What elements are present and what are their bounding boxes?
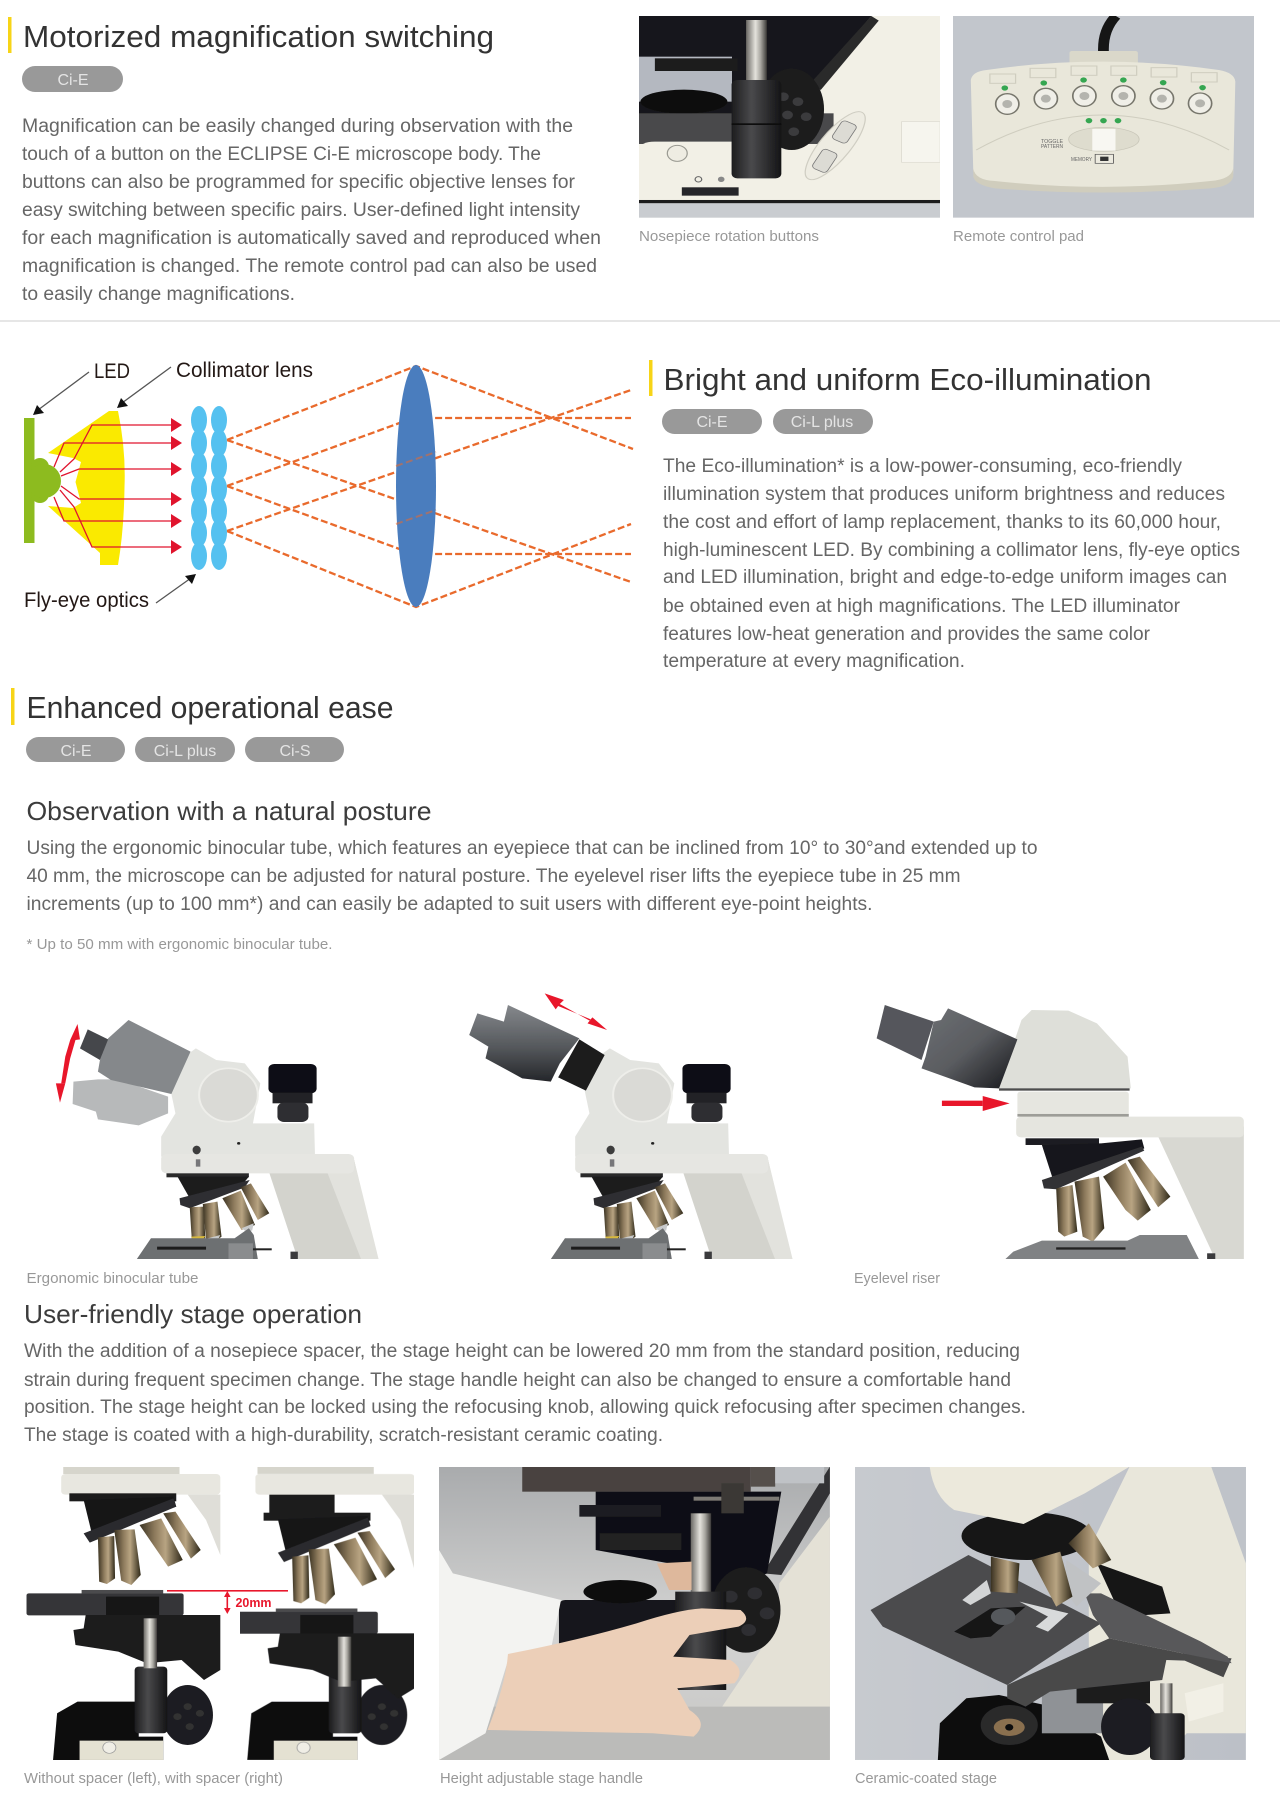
body text: eco-illumination [663,456,1240,672]
body text: natural posture: increments (up to 100 mm*) and can easily be adapted to suit users with different eye-point heights. [26,894,872,915]
fly-eye and condenser light paths [227,366,633,607]
heading: Bright and uniform Eco-illumination: Bright and uniform Eco-illumination [664,363,1152,397]
body text: eco-illumination: illumination system that produces uniform brightness and reduces [663,484,1225,505]
body text: magnification switching: magnification is changed. The remote control pad can also be used [22,256,597,277]
accent bar: section 2 [649,360,652,396]
photo: remote control pad: MEMORY [1071,157,1093,163]
photo: eyelevel riser [877,1005,1244,1259]
model badge: Ci-E: Ci-E [696,414,728,431]
photo: remote control pad [953,16,1254,218]
accent bar: section 1 [8,17,12,53]
caption: ergonomic binocular tube: Ergonomic binocular tube [26,1270,198,1287]
caption: spacer comparison: Without spacer (left), with spacer (right) [24,1770,283,1787]
body text: magnification switching: Magnification can be easily changed during observation with the [22,116,573,137]
light paths over lens [396,452,436,524]
relay lens [396,365,436,607]
model badge: Ci-S: Ci-S [279,743,311,760]
with spacer [240,1467,414,1760]
body text: natural posture: 40 mm, the microscope can be adjusted for natural posture. The eyelevel riser lifts the eyepiece tube in 25 mm [26,866,960,887]
without spacer [27,1467,220,1760]
caption: nosepiece rotation buttons: Nosepiece rotation buttons [639,228,819,245]
body text: eco-illumination: and LED illumination, bright and edge-to-edge uniform images can [663,567,1227,588]
model badge: Ci-L plus: Ci-L plus [154,743,216,760]
body text: eco-illumination: the cost and effort of lamp replacement, thanks to its 60,000 hour, [663,512,1221,533]
body text: stage operation: strain during frequent specimen change. The stage handle height can also be changed to ensure a comfortable hand [24,1370,1011,1391]
body text: eco-illumination: The Eco-illumination* is a low-power-consuming, eco-friendly [663,456,1183,477]
caption: remote control pad: Remote control pad [953,228,1084,245]
section: bright and uniform eco-illumination [649,360,1240,672]
photo: height adjustable stage handle [439,1467,830,1760]
model badge: Ci-S [245,737,344,762]
body text: magnification switching: buttons can also be programmed for specific objective lenses for [22,172,576,193]
20 mm dimension marker [167,1590,288,1614]
body text: magnification switching: for each magnification is automatically saved and reproduced when [22,228,601,249]
photo: remote control pad: PATTERN [1041,144,1063,150]
body text: magnification switching: easy switching between specific pairs. User-defined light intensity [22,200,580,221]
subheading: stage operation: User-friendly stage operation [24,1299,362,1329]
label: Fly-eye optics: Fly-eye optics [24,589,149,612]
red arrowheads [171,418,182,554]
model badge: Ci-L plus: Ci-L plus [791,414,853,431]
caption: ceramic-coated stage: Ceramic-coated stage [855,1770,997,1787]
model badge: Ci-E: Ci-E [60,743,92,760]
LED emitter [27,458,61,503]
body text: eco-illumination: features low-heat generation and provides the same color [663,624,1151,645]
body text: eco-illumination: temperature at every magnification. [663,651,965,672]
caption: stage handle: Height adjustable stage handle [440,1770,643,1787]
heading: Motorized magnification switching: Motorized magnification switching [23,20,494,54]
fly-eye optics [191,406,227,570]
body text: natural posture [26,838,1038,915]
photo: ergonomic binocular tube, tilting [56,1020,379,1259]
model badge: Ci-E: Ci-E [57,72,89,89]
LED mount [24,418,34,543]
20 mm dimension marker: 20mm [236,1595,272,1610]
footnote: * Up to 50 mm with ergonomic binocular tube. [26,936,332,953]
label: LED: LED [94,360,130,383]
model badge: Ci-E [662,409,762,434]
label: Collimator lens: Collimator lens [176,359,313,382]
pointer arrows [33,367,196,603]
collimator lens [48,411,125,565]
body text: stage operation: position. The stage height can be locked using the refocusing knob, allowing quick refocusing after specimen changes. [24,1397,1026,1418]
body text: magnification switching [22,116,601,305]
subheading: natural posture: Observation with a natural posture [26,796,432,826]
body text: magnification switching: touch of a button on the ECLIPSE Ci-E microscope body. The [22,144,541,165]
accent bar: section 3 [11,688,14,725]
body text: stage operation: With the addition of a nosepiece spacer, the stage height can be lowered 20 mm from the standard position, reducing [24,1341,1020,1362]
diagram: LED illumination optics [24,359,633,612]
body text: stage operation [24,1341,1026,1446]
body text: stage operation: The stage is coated with a high-durability, scratch-resistant ceramic coating. [24,1425,663,1446]
photo: ceramic-coated stage [855,1467,1246,1760]
photo: nosepiece rotation buttons [639,16,940,218]
body text: eco-illumination: be obtained even at high magnifications. The LED illuminator [663,596,1181,617]
caption: eyelevel riser: Eyelevel riser [854,1270,940,1287]
red rays [54,425,171,547]
body text: magnification switching: to easily change magnifications. [22,284,295,305]
heading: Enhanced operational ease: Enhanced operational ease [26,691,394,725]
section: motorized magnification switching [8,16,1254,305]
photo: ergonomic binocular tube, extending [469,993,793,1259]
body text: natural posture: Using the ergonomic binocular tube, which features an eyepiece that can be inclined from 10° to 30°and extended up to [26,838,1038,859]
model badge: Ci-L plus [773,409,873,434]
model badge: Ci-E [26,737,125,762]
photo: remote control pad: TOGGLE [1041,139,1064,145]
photo: stage without and with spacer [27,1467,415,1760]
model badge: Ci-E [22,66,123,92]
model badge: Ci-L plus [135,737,235,762]
body text: eco-illumination: high-luminescent LED. By combining a collimator lens, fly-eye optics [663,540,1240,561]
section: enhanced operational ease [11,688,1246,1787]
